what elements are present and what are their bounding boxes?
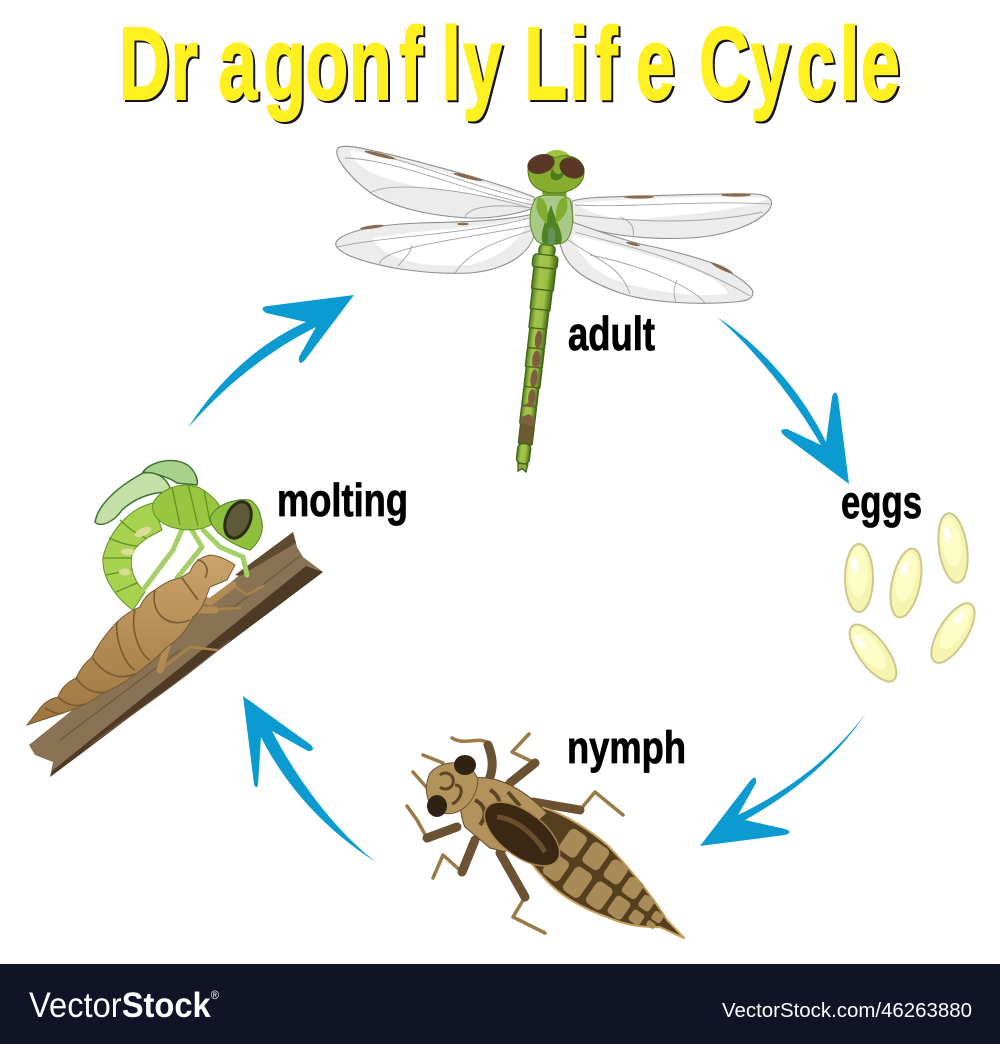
egg 5: [923, 597, 983, 669]
egg 2: [885, 546, 927, 620]
exuvia body: [27, 555, 235, 725]
arrow: eggs to nymph: [700, 713, 866, 846]
exuvia legs: [160, 585, 263, 670]
nymph abdomen: [496, 793, 704, 966]
title: [119, 5, 900, 121]
egg 4: [841, 617, 905, 689]
head and eyes: [525, 150, 588, 193]
emerging adult wings: [95, 461, 197, 524]
abdomen: [508, 244, 560, 473]
label: molting: molting: [277, 474, 408, 526]
egg 1: [845, 544, 873, 612]
wings: [336, 146, 772, 303]
adult dragonfly illustration: [336, 146, 772, 473]
title: Dragonfly: [119, 5, 502, 121]
wing pad: [474, 790, 570, 878]
footer logo: ®: [211, 988, 219, 1002]
emerging adult abdomen: [103, 503, 162, 610]
footer logo: VectorStock: [29, 986, 217, 1025]
label: nymph: nymph: [567, 722, 686, 773]
label: adult: adult: [568, 307, 655, 360]
thorax: [530, 186, 573, 245]
abdomen cells: [540, 825, 678, 946]
arrow: molting to adult: [188, 295, 354, 428]
arrow: adult to eggs: [717, 317, 849, 484]
emerging adult legs: [143, 527, 247, 590]
thorax and head: [461, 778, 547, 852]
title: Cycle: [699, 5, 900, 121]
nymph legs: [407, 734, 623, 933]
egg 3: [934, 511, 972, 585]
label: eggs: eggs: [841, 476, 922, 528]
branch: [29, 532, 323, 777]
footer bar: [0, 964, 1000, 1044]
arrow: nymph to molting: [243, 696, 376, 862]
emerging adult thorax: [153, 485, 222, 530]
title: Life: [524, 5, 675, 121]
nymph illustration: [407, 734, 704, 966]
emerging adult head: [210, 500, 262, 550]
footer image id: VectorStock.com/46263880: [722, 1000, 972, 1022]
molting illustration: [27, 461, 323, 777]
emerging adult eye: [220, 498, 256, 542]
exuvia segments and folds: [45, 560, 207, 714]
eggs: [841, 511, 983, 689]
